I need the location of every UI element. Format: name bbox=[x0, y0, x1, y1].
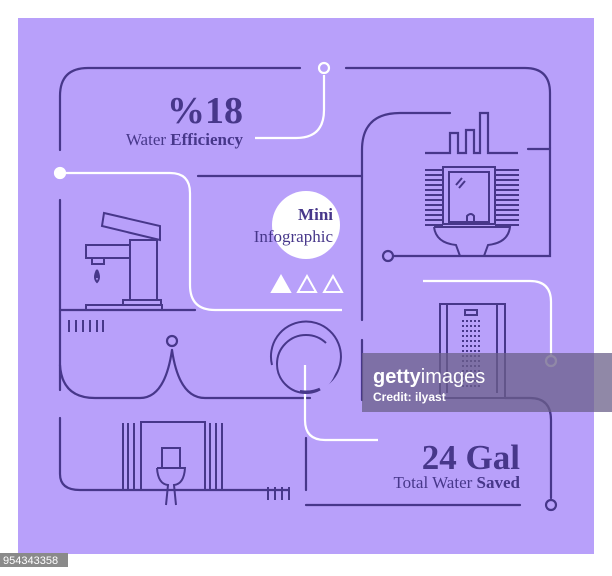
heading: 24 Gal Total Water Saved: Total Water Saved bbox=[393, 473, 521, 492]
heading: %18 Water Efficiency: Water Efficiency bbox=[126, 130, 243, 149]
heading: 24 Gal Total Water Saved bbox=[393, 438, 521, 492]
node circles bbox=[55, 63, 556, 510]
icon: bar chart bbox=[425, 113, 518, 153]
watermark band bbox=[362, 353, 612, 412]
watermark band: Credit: ilyast bbox=[373, 390, 446, 404]
icon: triangles bbox=[272, 276, 342, 292]
white connector lines bbox=[60, 75, 551, 440]
circle: Mini Infographic bbox=[254, 191, 340, 259]
icon: sink with mirror bbox=[425, 167, 519, 256]
icon: toilet stall bbox=[123, 422, 222, 505]
circle: Mini Infographic: Infographic bbox=[254, 227, 333, 246]
circle: Mini Infographic: Mini bbox=[298, 205, 333, 224]
icon: faucet bbox=[86, 213, 162, 310]
watermark band: gettyimages bbox=[373, 366, 485, 388]
icon: shower bbox=[435, 304, 512, 398]
heading: 24 Gal Total Water Saved: 24 Gal bbox=[422, 438, 520, 477]
icon: dial bbox=[271, 322, 341, 393]
vent lines bbox=[69, 320, 289, 500]
id tag: 954343358 bbox=[3, 555, 58, 567]
id tag bbox=[0, 553, 68, 567]
heading: %18 Water Efficiency: %18 bbox=[167, 90, 243, 132]
heading: %18 Water Efficiency bbox=[126, 90, 243, 149]
